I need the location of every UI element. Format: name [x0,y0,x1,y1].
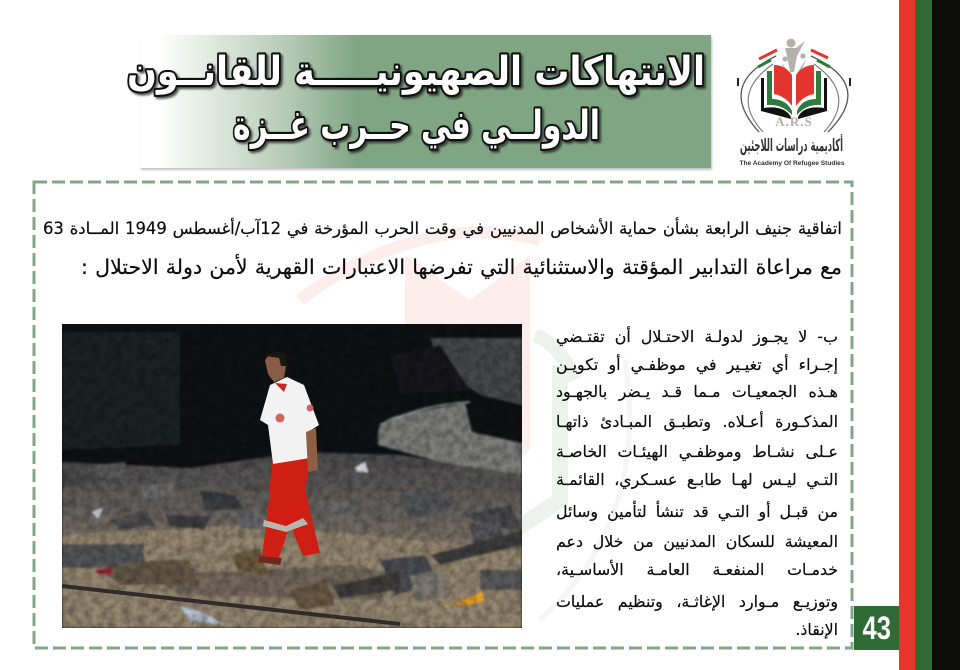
body text: article paragraph [556,326,838,639]
page number: 43 [862,610,891,646]
page number [854,606,899,650]
body text: article paragraph: وتوزيـع مـوارد الإغاثـة، وتنظيم عمليات [556,592,838,611]
heading line: occupation security: مع مراعاة التدابير المؤقتة والاستثنائية التي تفرضها الاعتبارات القهرية لأمن دولة الاحتلال : [81,255,842,279]
concrete ruin [378,403,522,475]
paramedic [258,352,320,565]
arm [306,428,318,472]
body text: article paragraph: خدمـات المنفعـة العامـة الأساسـية، [556,560,838,579]
stripe: red [899,0,915,670]
title text: الدولــي في حــرب غــزة [233,103,600,149]
body text: article paragraph: المعيشة للسكان المدنيين من خلال دعم [556,532,838,551]
title text: الانتهاكات الصهيونيـــــة للقانــون [127,49,705,95]
watermark: faint academy logo [296,226,632,622]
rubble ground [62,452,522,628]
wall [62,332,180,450]
body text: article paragraph: من قبـل أو التـي قد تنشأ لتأمين وسائل [556,502,838,521]
rubble blocks [62,544,144,568]
rail on ground [62,586,400,624]
photo grain texture [62,324,522,628]
shirt [260,377,319,464]
cloth scraps [443,592,485,608]
stripe: black [932,0,960,670]
shoes [258,556,282,565]
body text: article paragraph: التـي ليـس لهـا طابـع عسـكري، القائمـة [556,470,838,489]
title text [127,49,708,155]
logo: Academy of Refugee Studies [737,38,851,167]
icon: figure above book [782,38,806,75]
photo: paramedic walking through rubble [62,324,522,628]
photo background [62,324,522,628]
stripe: green [915,0,932,670]
title banner [140,35,711,168]
body text: article paragraph: إجـراء أي تغيـير في موظفـي أو تكويـن [556,355,838,374]
body text: article paragraph: هـذه الجمعيـات مـما قـد يـضر بالجهـود [556,382,838,401]
body text: article paragraph: ب- لا يجـوز لدولـة الاحتـلال أن تقتـضي [556,327,838,346]
logo letters: A.R.S [775,114,813,129]
icon: arcs [738,50,850,132]
logo english name: The Academy Of Refugee Studies [740,161,845,167]
trousers [262,456,320,560]
body text: article paragraph: المذكـورة أعـلاه. وتطبـق المبـادئ ذاتهـا [556,412,838,431]
body text: article paragraph: الإنقاذ. [795,620,838,639]
icon: open book [761,65,827,119]
body text: article paragraph: عـلى نشـاط وموظفـي الهيئـات الخاصـة [556,442,838,461]
heading line: convention citation: اتفاقية جنيف الرابعة بشأن حماية الأشخاص المدنيين في وقت الحرب المؤرخة في 12آب/أغسطس 1949 المــادة 63 [43,219,842,238]
head [265,353,286,382]
